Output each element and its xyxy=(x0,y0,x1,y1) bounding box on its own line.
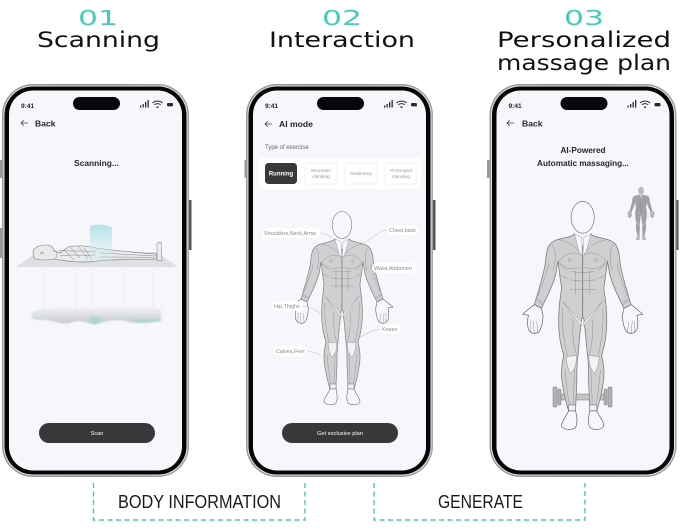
scan projection lines xyxy=(44,268,153,312)
exercise type selector: standing xyxy=(392,174,410,180)
bracket: generate: GENERATE xyxy=(438,492,523,512)
bracket: generate xyxy=(374,483,585,520)
step 1 heading xyxy=(37,6,160,52)
exercise type selector: Mountain xyxy=(311,168,331,174)
header: AI mode xyxy=(279,119,313,129)
scan button: Scan xyxy=(91,431,103,437)
status text xyxy=(537,146,629,168)
exercise type selector xyxy=(259,158,421,189)
step 3 heading xyxy=(497,6,671,75)
scan button xyxy=(39,423,155,443)
bracket: body information xyxy=(94,483,305,520)
exercise type selector: Prolonged xyxy=(390,168,412,174)
step 2 heading: Interaction xyxy=(269,28,415,52)
body part labels: Knees xyxy=(382,327,398,333)
step 2 heading: 02 xyxy=(322,6,362,30)
body part labels xyxy=(262,225,419,356)
step 1 heading: 01 xyxy=(78,6,118,30)
scanning status: Scanning... xyxy=(74,158,119,168)
exercise type selector: Sedentary xyxy=(350,171,373,177)
scan platform xyxy=(16,252,178,267)
body part labels: Calves,Feet xyxy=(276,349,305,355)
back link: Back xyxy=(35,118,56,128)
back link xyxy=(507,118,543,128)
scan result contour xyxy=(32,306,161,325)
exercise type label: Type of exercise xyxy=(265,145,309,151)
body part labels: Chest,back xyxy=(389,228,416,234)
large body figure xyxy=(523,201,643,430)
small reference figure xyxy=(627,187,655,240)
phone 2: interaction xyxy=(244,84,436,477)
step 1 heading: Scanning xyxy=(37,28,160,52)
step 3 heading: massage plan xyxy=(497,51,671,75)
status text: AI-Powered xyxy=(560,146,606,155)
exercise type selector: Running xyxy=(269,172,293,178)
back link: Back xyxy=(522,118,543,128)
back link xyxy=(21,118,56,128)
exercise type selector: climbing xyxy=(312,174,330,180)
body part labels: Waist,Abdomen xyxy=(374,266,412,272)
status text: Automatic massaging... xyxy=(537,159,629,168)
plan button: Get exclusive plan xyxy=(317,431,363,437)
scanner beam xyxy=(90,225,112,263)
phone 1: scanning xyxy=(0,84,192,477)
dumbbell xyxy=(553,387,612,407)
body part labels: Shoulders,Neck,Arms xyxy=(264,231,316,237)
body part labels: Hip,Thighs xyxy=(274,304,300,310)
step 2 heading xyxy=(269,6,415,52)
lying body xyxy=(33,242,162,262)
step 3 heading: Personalized xyxy=(497,28,671,52)
bracket: body information: BODY INFORMATION xyxy=(118,492,281,512)
phone 3: personalized massage plan xyxy=(487,84,678,477)
body figure xyxy=(291,212,393,405)
step 3 heading: 03 xyxy=(564,6,604,30)
leader lines xyxy=(301,230,388,355)
plan button xyxy=(282,423,398,443)
